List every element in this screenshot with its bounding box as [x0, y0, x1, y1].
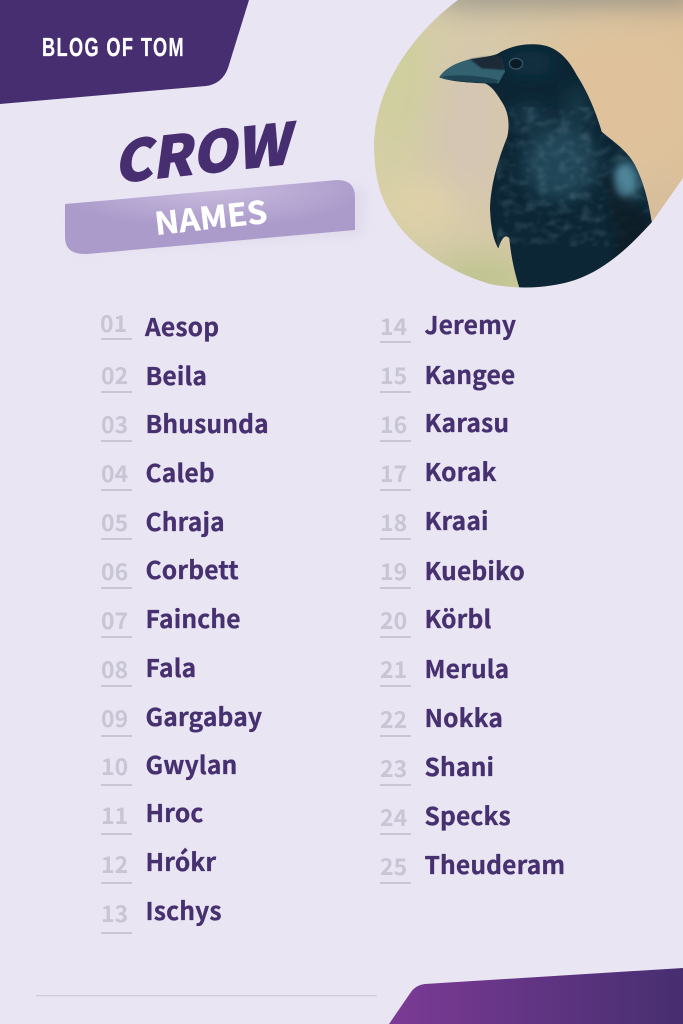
name 01: Aesop [144, 308, 219, 344]
name 13 [101, 892, 222, 934]
name 12: 12 [101, 846, 128, 880]
wing shadow [603, 174, 653, 263]
name 13: 13 [101, 895, 128, 929]
name 07 [101, 600, 241, 638]
name 20: Körbl [424, 600, 492, 636]
name 22 [380, 699, 503, 737]
name 19: Kuebiko [424, 552, 525, 588]
name 22: 22 [380, 701, 407, 735]
name 02 [101, 357, 207, 393]
name 10: 10 [101, 748, 128, 782]
name 16: Karasu [424, 404, 509, 440]
name 05: Chraja [146, 503, 225, 539]
name 20 [380, 600, 492, 638]
name 15: Kangee [424, 356, 515, 392]
name 06 [101, 551, 239, 589]
name 01: 01 [100, 305, 127, 339]
name 02: Beila [146, 357, 207, 393]
name 24: Specks [424, 797, 511, 833]
crow body [439, 44, 652, 288]
wing highlight [614, 163, 636, 197]
name 23: Shani [424, 748, 494, 784]
name 25: 25 [380, 848, 407, 882]
name 09: 09 [101, 700, 128, 734]
name 17: Korak [424, 453, 496, 489]
beak [439, 58, 505, 83]
crow photo [374, 0, 683, 288]
footer banner [389, 968, 683, 1024]
name 24: 24 [380, 799, 407, 833]
name 04: Caleb [146, 454, 215, 490]
name 08: 08 [101, 651, 128, 685]
name 21: 21 [380, 651, 407, 685]
name 14: 14 [380, 308, 407, 342]
name 12: Hrókr [146, 843, 216, 879]
name 12 [101, 843, 216, 884]
names banner [65, 180, 367, 254]
name 14: Jeremy [424, 306, 516, 342]
name 09: Gargabay [146, 698, 262, 734]
name 06: 06 [101, 553, 128, 587]
names label: NAMES [152, 187, 269, 244]
left name list [100, 305, 269, 934]
name 15 [380, 356, 515, 393]
name 11: Hroc [146, 794, 204, 830]
feather texture [497, 107, 653, 247]
name 05: 05 [101, 504, 128, 538]
header banner [0, 0, 249, 104]
name 13: Ischys [146, 892, 222, 928]
name 03: 03 [101, 406, 128, 440]
name 06: Corbett [146, 551, 239, 587]
name 16 [380, 404, 509, 442]
name 11: 11 [101, 797, 128, 831]
name 17: 17 [380, 455, 407, 489]
brand text: BLOG OF TOM [42, 32, 185, 62]
name 01 [100, 305, 219, 344]
name 18: Kraai [424, 502, 489, 538]
name 07: 07 [101, 602, 128, 636]
name 20: 20 [380, 602, 407, 636]
name 18: 18 [380, 504, 407, 538]
name 09 [101, 698, 262, 737]
name 19 [380, 552, 525, 589]
eye [509, 58, 523, 69]
name 23 [380, 748, 494, 786]
name 15: 15 [380, 357, 407, 391]
name 07: Fainche [146, 600, 241, 636]
name 04 [101, 454, 215, 491]
name 19: 19 [380, 553, 407, 587]
name 18 [380, 502, 489, 540]
name 17 [380, 453, 496, 491]
name 08: Fala [146, 649, 196, 685]
name 25: Theuderam [424, 846, 565, 882]
right name list [380, 306, 565, 884]
name 14 [380, 306, 516, 343]
name 24 [380, 797, 511, 835]
name 02: 02 [101, 357, 128, 391]
name 23: 23 [380, 750, 407, 784]
name 05 [101, 503, 225, 540]
name 16: 16 [380, 406, 407, 440]
name 04: 04 [101, 455, 128, 489]
title: crow: CROW [108, 99, 303, 200]
name 21 [380, 650, 509, 687]
name 03: Bhusunda [146, 405, 269, 441]
name 22: Nokka [424, 699, 503, 735]
name 10: Gwylan [146, 746, 237, 782]
name 08 [101, 649, 196, 687]
name 21: Merula [424, 650, 509, 686]
name 11 [101, 794, 204, 835]
name 10 [101, 746, 237, 786]
